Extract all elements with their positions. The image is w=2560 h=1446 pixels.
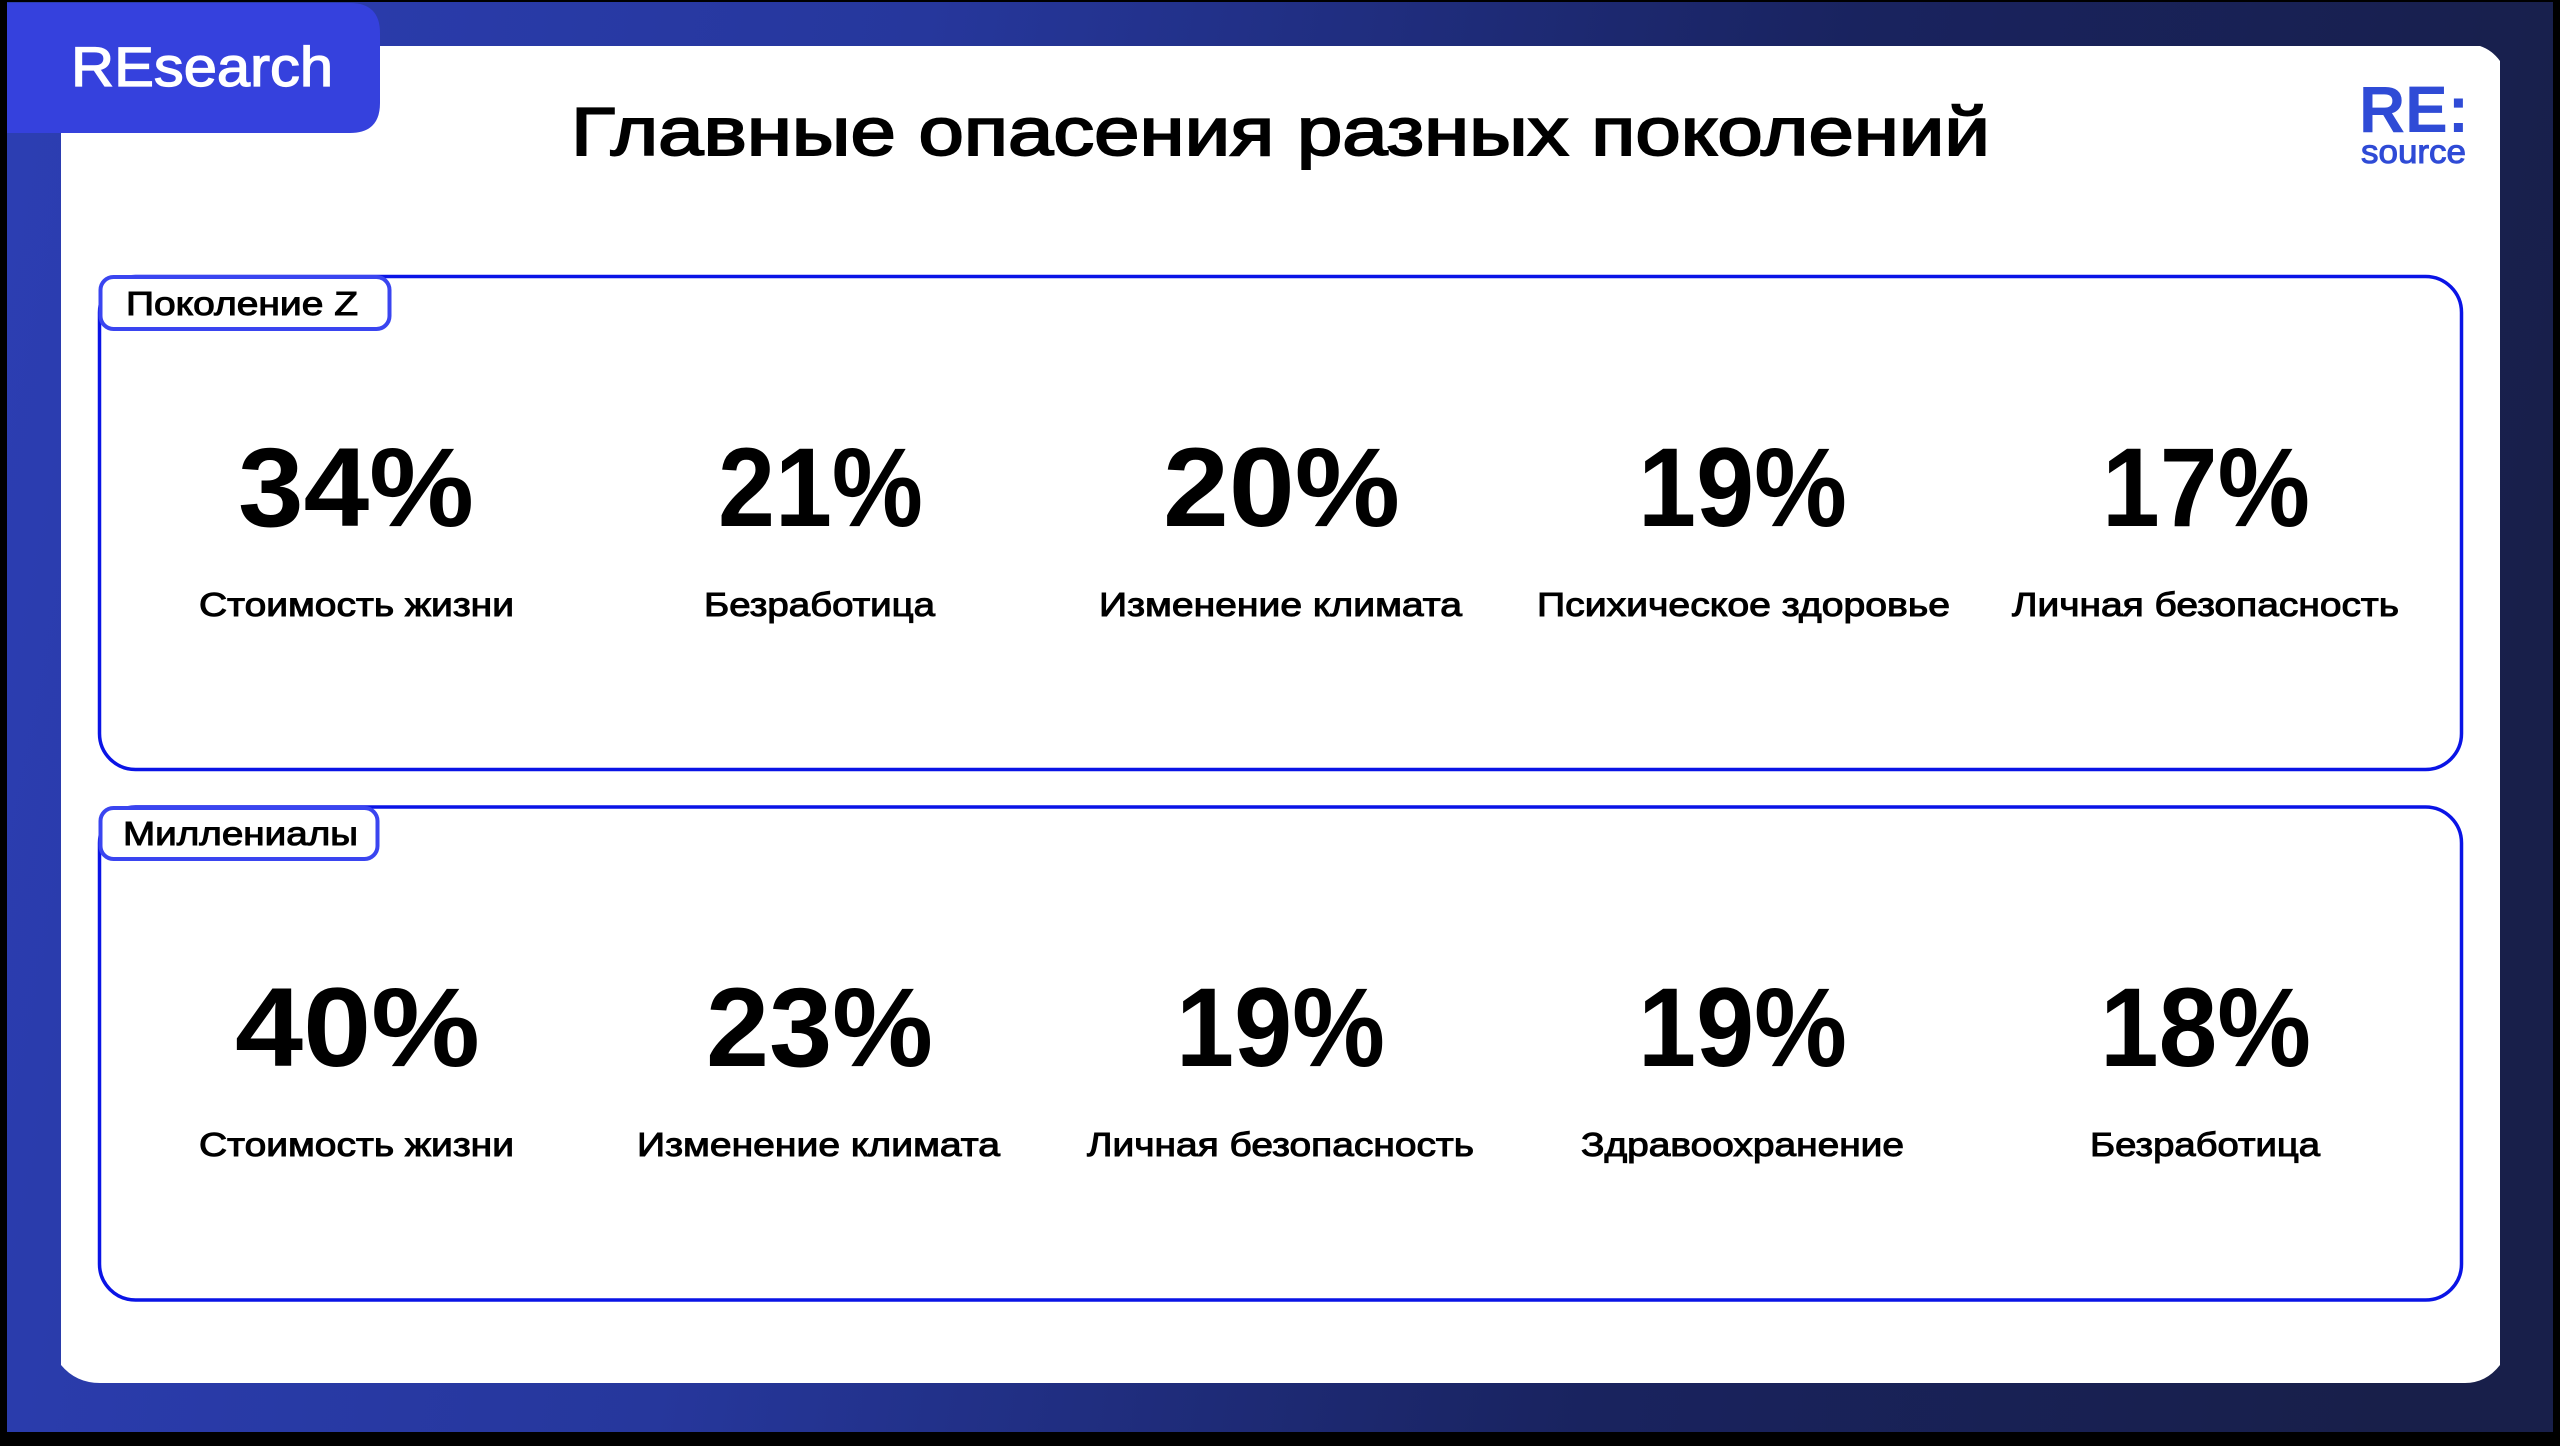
stat: 23% climate change: 23%: [706, 965, 933, 1090]
stat: 40% cost of living: 40%: [235, 965, 480, 1090]
stat: 19% healthcare: Здравоохранение: [1581, 1126, 1904, 1163]
title: Главные опасения разных поколений: [571, 94, 1990, 170]
stat: 34% cost of living: [199, 425, 514, 623]
logo: RE:source: source: [2361, 133, 2466, 170]
stat: 21% unemployment: Безработица: [704, 586, 936, 623]
tag: Миллениалы: Миллениалы: [123, 815, 358, 852]
stat: 19% personal safety: Личная безопасность: [1087, 1126, 1474, 1163]
tab: REsearch: [7, 3, 380, 133]
stat: 20% climate change: Изменение климата: [1099, 586, 1463, 623]
stat: 34% cost of living: Стоимость жизни: [199, 586, 514, 623]
stat: 20% climate change: [1099, 425, 1463, 623]
panel: Миллениалы: [100, 807, 2462, 1300]
stat: 19% personal safety: [1087, 965, 1474, 1163]
stat: 19% mental health: [1537, 425, 1950, 623]
stat: 40% cost of living: Стоимость жизни: [199, 1126, 514, 1163]
stat: 40% cost of living: [199, 965, 514, 1163]
stat: 23% climate change: Изменение климата: [637, 1126, 1001, 1163]
stat: 17% personal safety: Личная безопасность: [2012, 586, 2399, 623]
tag: Миллениалы: [100, 808, 378, 859]
stat: 19% mental health: Психическое здоровье: [1537, 586, 1950, 623]
logo: RE:source: RE:: [2359, 72, 2469, 146]
tab: REsearch: REsearch: [71, 35, 333, 98]
stat: 34% cost of living: 34%: [238, 425, 474, 550]
stat: 19% healthcare: 19%: [1638, 965, 1847, 1090]
stat: 18% unemployment: [2090, 965, 2321, 1163]
stat: 23% climate change: [637, 965, 1001, 1163]
stat: 18% unemployment: Безработица: [2090, 1126, 2321, 1163]
panel: Поколение Z: [100, 276, 2462, 770]
stat: 19% personal safety: 19%: [1176, 965, 1385, 1090]
tag: Поколение Z: [100, 277, 390, 329]
stat: 18% unemployment: 18%: [2100, 965, 2311, 1090]
stat: 19% healthcare: [1581, 965, 1904, 1163]
stat: 19% mental health: 19%: [1638, 425, 1847, 550]
stat: 21% unemployment: 21%: [718, 425, 923, 550]
stat: 17% personal safety: [2012, 425, 2399, 623]
stat: 20% climate change: 20%: [1163, 425, 1400, 550]
stat: 21% unemployment: [704, 425, 936, 623]
tag: Поколение Z: Поколение Z: [126, 285, 358, 322]
stat: 17% personal safety: 17%: [2102, 425, 2310, 550]
